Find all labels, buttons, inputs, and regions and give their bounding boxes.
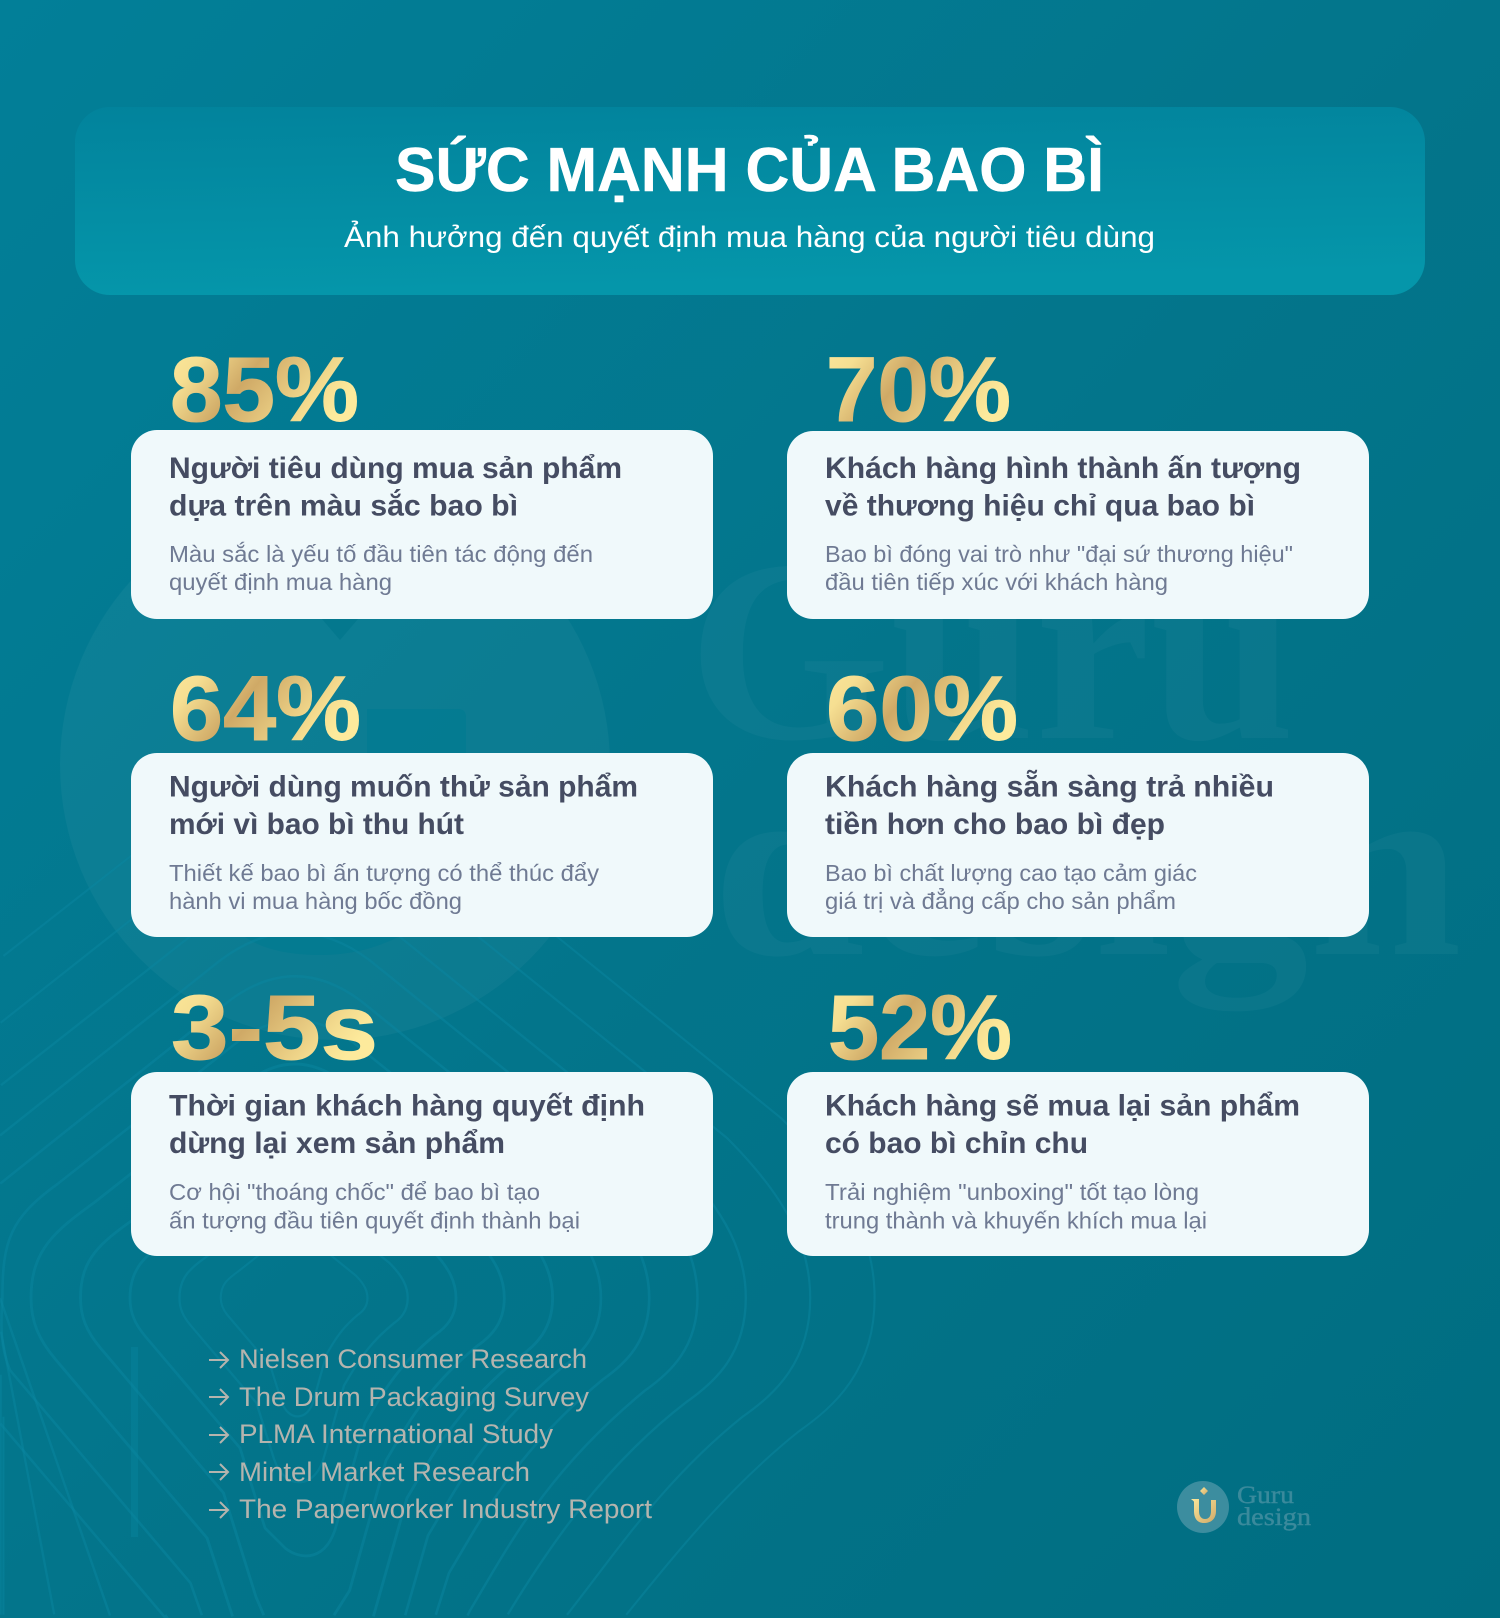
stat 52%: có bao bì chỉn chu — [825, 1127, 1088, 1160]
stat 85%: dựa trên màu sắc bao bì — [169, 488, 518, 522]
stat 85%: quyết định mua hàng — [169, 569, 392, 595]
icon: logo badge — [1177, 1481, 1229, 1533]
stat 70%: 70% — [826, 339, 1011, 441]
stat 85%: Người tiêu dùng mua sản phẩm — [169, 452, 622, 485]
stat 3-5s: Cơ hội "thoáng chốc" để bao bì tạo — [169, 1179, 540, 1205]
logo: Guru design — [1177, 1481, 1312, 1533]
stat 64%: Thiết kế bao bì ấn tượng có thể thúc đẩy — [169, 860, 599, 886]
watermark: Guru design wordmark: Guru — [688, 507, 1295, 795]
sources list: PLMA International Study — [239, 1419, 554, 1449]
watermark: Guru design wordmark — [688, 507, 1462, 1015]
icon: arrow — [209, 1389, 228, 1405]
stat 85%: Màu sắc là yếu tố đầu tiên tác động đến — [169, 541, 593, 567]
stat 70%: Khách hàng hình thành ấn tượng — [825, 452, 1301, 485]
watermark: Guru design wordmark: design — [712, 723, 1462, 1015]
stat 52% — [787, 977, 1369, 1256]
stat 3-5s: Thời gian khách hàng quyết định — [169, 1090, 645, 1122]
stat 52%: 52% — [828, 977, 1012, 1079]
stat 70%: đầu tiên tiếp xúc với khách hàng — [825, 569, 1168, 595]
logo: Guru design: design — [1237, 1504, 1312, 1531]
sources list: The Paperworker Industry Report — [239, 1494, 653, 1524]
stat 3-5s — [131, 977, 713, 1256]
stat 70% — [787, 339, 1369, 619]
icon: arrow — [209, 1502, 228, 1518]
sources list — [209, 1344, 653, 1524]
stat 60%: Bao bì chất lượng cao tạo cảm giác — [825, 860, 1197, 886]
sources list: The Drum Packaging Survey — [239, 1382, 589, 1412]
stat 85%: 85% — [170, 339, 359, 441]
title: SỨC MẠNH CỦA BAO BÌ — [395, 136, 1104, 205]
sources list: Mintel Market Research — [239, 1457, 530, 1487]
stat 64%: mới vì bao bì thu hút — [169, 808, 464, 841]
subtitle: Ảnh hưởng đến quyết định mua hàng của người tiêu dùng — [344, 220, 1155, 254]
stat 60%: Khách hàng sẵn sàng trả nhiều — [825, 770, 1274, 804]
background contour lines — [0, 772, 875, 1618]
stat 70%: về thương hiệu chỉ qua bao bì — [825, 490, 1255, 522]
stat 60% — [787, 658, 1369, 937]
stat 70%: Bao bì đóng vai trò như "đại sứ thương hiệu" — [825, 541, 1293, 567]
stat 60%: giá trị và đẳng cấp cho sản phẩm — [825, 886, 1176, 914]
sources list: Nielsen Consumer Research — [239, 1344, 587, 1374]
watermark: logo circle — [60, 490, 610, 1040]
stat 52%: Trải nghiệm "unboxing" tốt tạo lòng — [825, 1179, 1199, 1205]
stat 52%: trung thành và khuyến khích mua lại — [825, 1208, 1207, 1234]
icon: arrow — [209, 1464, 228, 1480]
decorative vertical bar — [131, 1347, 138, 1537]
stat 3-5s: 3-5s — [171, 977, 378, 1079]
stat 52%: Khách hàng sẽ mua lại sản phẩm — [825, 1090, 1300, 1122]
stat 64% — [131, 658, 713, 937]
stat 64%: hành vi mua hàng bốc đồng — [169, 888, 462, 914]
icon: arrow — [209, 1427, 228, 1443]
stat 3-5s: dừng lại xem sản phẩm — [169, 1127, 505, 1160]
logo: Guru design: Guru — [1237, 1482, 1295, 1509]
stat 64%: Người dùng muốn thử sản phẩm — [169, 770, 638, 804]
stat 85% — [131, 339, 713, 619]
icon: arrow — [209, 1352, 228, 1368]
stat 3-5s: ấn tượng đầu tiên quyết định thành bại — [169, 1208, 580, 1234]
header panel — [75, 107, 1425, 295]
stat 64%: 64% — [170, 658, 361, 760]
stat 60%: tiền hơn cho bao bì đẹp — [825, 808, 1165, 841]
stat 60%: 60% — [826, 658, 1018, 760]
